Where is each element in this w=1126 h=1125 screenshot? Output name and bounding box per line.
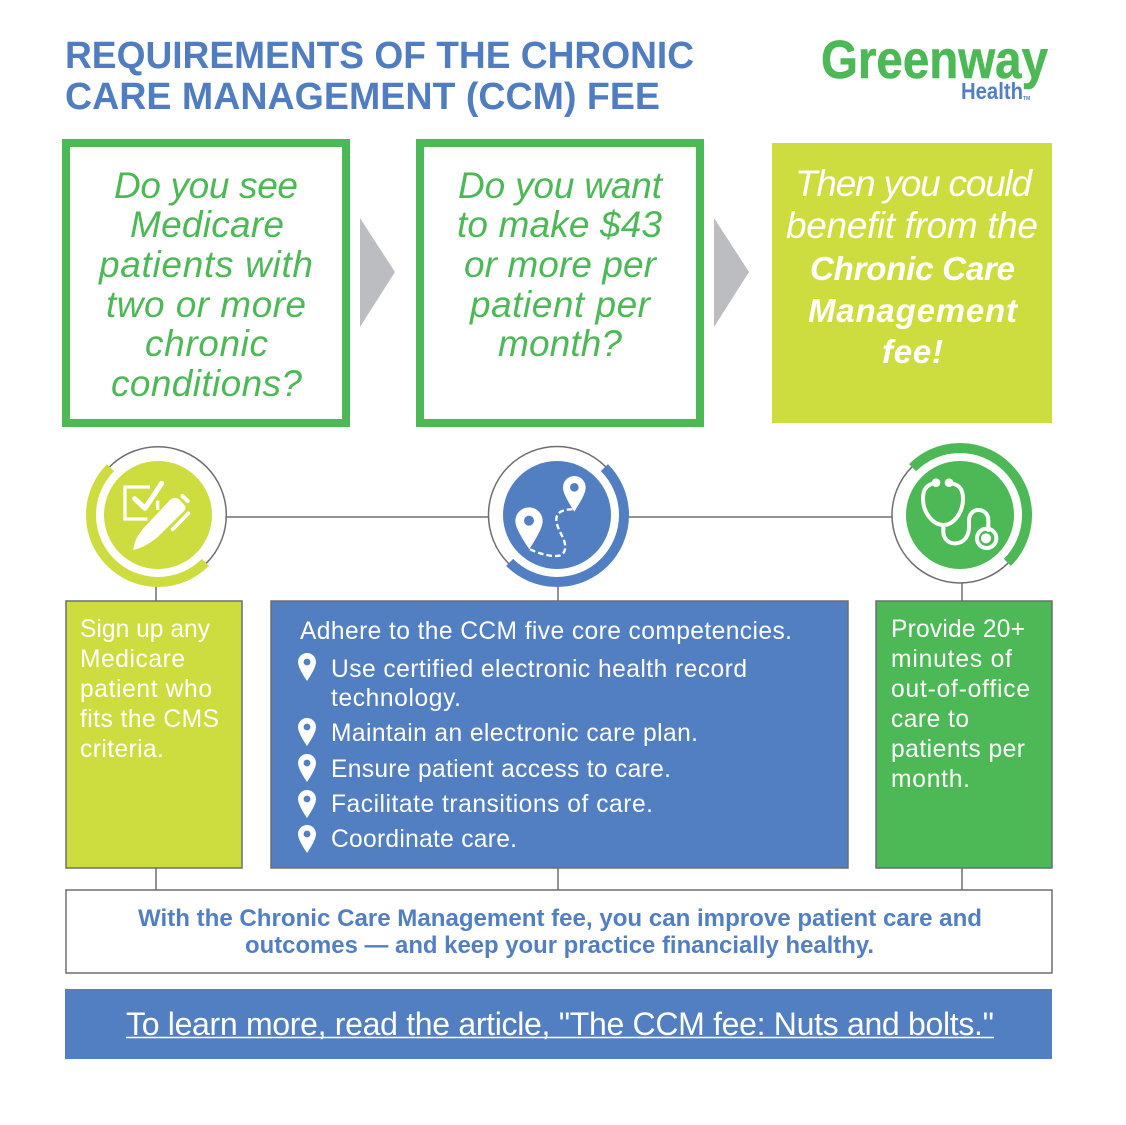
panel: provide out-of-office care [876,601,1052,868]
panel: sign up patients: fits the CMS [80,706,219,733]
panel: conclusion [772,143,1052,423]
title: CARE MANAGEMENT (CCM) FEE [65,76,660,118]
arrow: question one to question two [360,218,395,327]
call to action banner [65,989,1052,1059]
list of competencies [331,656,747,853]
list of competencies: Use certified electronic health record [331,656,747,683]
icon: map pins and route [488,446,626,584]
call to action banner: To learn more, read the article, "The CCM fee: Nuts and bolts." [126,1006,994,1042]
panel: conclusion: Then you could [795,163,1033,204]
logo: Greenway Health: Greenway [821,30,1048,90]
callout: benefit statement [66,890,1052,973]
panel: sign up patients [66,601,242,868]
panel: question two [420,143,700,423]
list of competencies: Maintain an electronic care plan. [331,720,698,747]
panel: question one: conditions? [111,363,302,404]
panel: conclusion: benefit from the [786,205,1038,246]
panel: five core competencies [271,601,848,868]
title [65,35,694,118]
list of competencies: technology. [331,685,461,712]
icon: checklist and pen [90,447,226,583]
panel: question one: chronic [145,323,268,364]
panel: provide out-of-office care: care to [891,706,969,733]
panel: provide out-of-office care: out-of-office [891,676,1030,703]
list of competencies: Coordinate care. [331,826,517,853]
list of competencies: Ensure patient access to care. [331,756,671,783]
logo: Greenway Health: TM [1023,96,1030,102]
logo: Greenway Health: Health [961,78,1023,104]
panel: sign up patients: patient who [80,676,212,703]
panel: question two: Do you want [458,165,664,206]
panel: question two: month? [498,323,622,364]
panel: question one: Medicare [130,204,284,245]
panel: conclusion: fee! [882,333,943,370]
panel: provide out-of-office care: Provide 20+ [891,616,1025,643]
panel: sign up patients: Medicare [80,646,185,673]
panel: provide out-of-office care: month. [891,766,970,793]
callout: benefit statement: With the Chronic Care Management fee, you can improve patient care and [138,905,982,932]
panel: question one [66,143,346,423]
panel: question two: or more per [464,244,658,285]
panel: sign up patients: criteria. [80,736,164,763]
arrow: question two to conclusion [714,218,749,327]
panel: question two: to make $43 [457,204,662,245]
panel: question one: Do you see [114,165,298,206]
panel: conclusion: Chronic Care [810,250,1015,287]
panel: sign up patients: Sign up any [80,616,211,643]
competencies heading: Adhere to the CCM five core competencies. [300,618,792,645]
panel: question two: patient per [469,284,652,325]
panel: conclusion: Management [808,292,1019,329]
icon: list location pins [298,653,316,853]
panel: question one: two or more [106,284,306,325]
callout: benefit statement: outcomes — and keep your practice financially healthy. [245,932,874,959]
list of competencies: Facilitate transitions of care. [331,791,653,818]
panel: provide out-of-office care: patients per [891,736,1025,763]
panel: provide out-of-office care: minutes of [891,646,1012,673]
title: REQUIREMENTS OF THE CHRONIC [65,35,694,77]
panel: question one: patients with [98,244,313,285]
icon: stethoscope [892,447,1028,583]
